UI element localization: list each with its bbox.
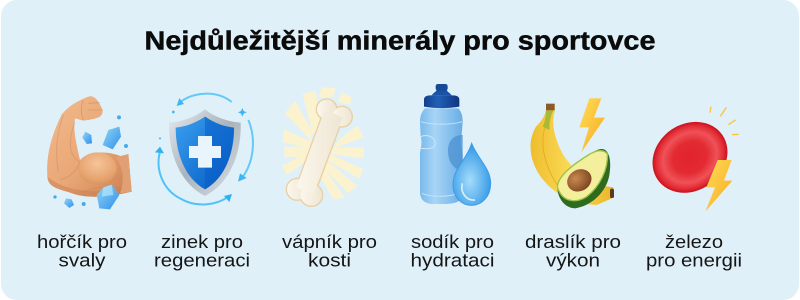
icon: banana lightning bolt: [579, 98, 605, 152]
icon: red blood cell with bolt: [639, 107, 741, 212]
label: zinek pro regeneraci: [154, 231, 250, 270]
label: hořčík pro svaly: [37, 231, 127, 270]
icon: cell lightning bolt: [705, 160, 732, 212]
icon: banana and avocado with bolt: [531, 98, 614, 208]
label: zinek pro regeneraci: zinek pro: [161, 231, 243, 252]
label: vápník pro kosti: [282, 231, 377, 270]
label: draslík pro výkon: [525, 231, 621, 270]
label: železo pro energii: pro energii: [646, 250, 742, 270]
label: vápník pro kosti: kosti: [308, 250, 351, 270]
label: železo pro energii: železo: [665, 231, 723, 252]
label: draslík pro výkon: výkon: [546, 250, 600, 270]
icon: glowing bone: [282, 87, 364, 207]
label: vápník pro kosti: vápník pro: [282, 231, 377, 252]
title: Nejdůležitější minerály pro sportovce: [144, 28, 656, 56]
icon: water bottle with drop: [420, 84, 491, 205]
label: sodík pro hydrataci: [410, 231, 494, 270]
label: zinek pro regeneraci: regeneraci: [154, 250, 250, 270]
label: sodík pro hydrataci: hydrataci: [410, 250, 494, 270]
label: železo pro energii: [646, 231, 742, 270]
label: hořčík pro svaly: svaly: [58, 250, 106, 270]
icon: flexed muscle arm with crystals: [47, 96, 132, 209]
label: hořčík pro svaly: hořčík pro: [37, 231, 127, 252]
label: draslík pro výkon: draslík pro: [525, 231, 621, 252]
label: sodík pro hydrataci: sodík pro: [411, 231, 494, 252]
icon: shield with cross and circular arrows: [155, 94, 253, 204]
